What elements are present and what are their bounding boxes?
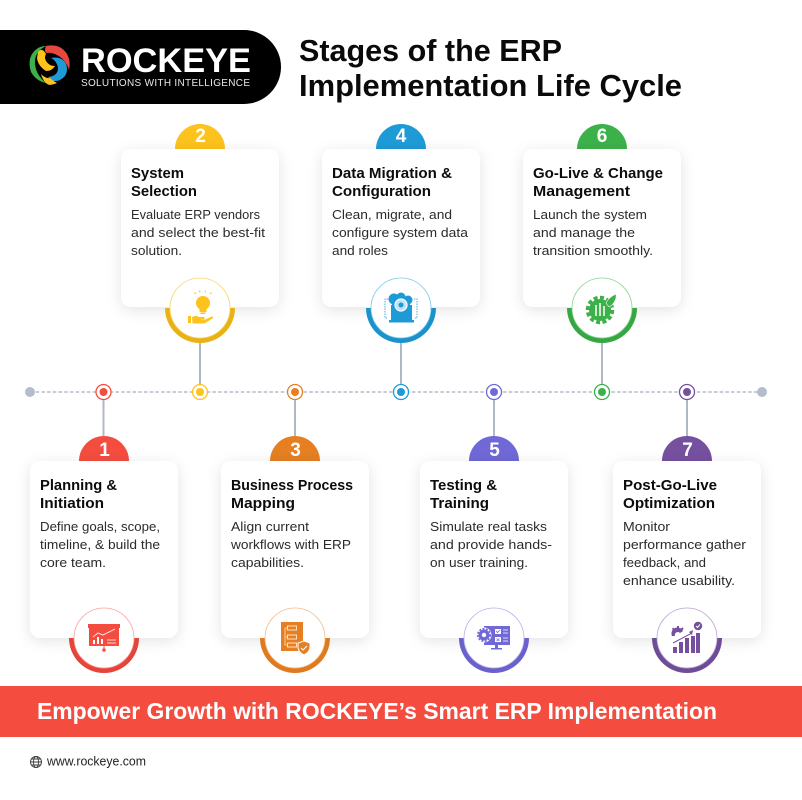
panel: stage 4 Data Migration & Configuration: configure system data — [332, 226, 468, 240]
title: Stages of the ERP — [299, 33, 562, 68]
icon: presentation board — [88, 624, 120, 652]
logo tagline: SOLUTIONS WITH INTELLIGENCE — [81, 78, 250, 89]
banner: Empower Growth with ROCKEYE’s Smart ERP Implementation — [37, 698, 717, 724]
panel: stage 3 Business Process Mapping: workflows with ERP — [230, 538, 351, 552]
website footer — [30, 754, 146, 768]
panel: stage 5 Testing & Training: and provide hands- — [430, 538, 552, 552]
panel: stage 3 Business Process Mapping: capabilities. — [231, 556, 304, 570]
panel: stage 1 Planning & Initiation: Define goals, scope, — [40, 520, 160, 534]
icon: globe — [30, 756, 42, 768]
panel: stage 5 Testing & Training: Testing & — [430, 477, 497, 494]
title — [299, 33, 682, 103]
panel: stage 5 Testing & Training: 5 — [489, 440, 500, 461]
panel: stage 7 Post-Go-Live Optimization: enhance usability. — [623, 574, 735, 588]
panel: stage 3 Business Process Mapping: Mapping — [231, 495, 295, 512]
icon: light bulb in hand — [188, 290, 213, 324]
panel: stage 7 Post-Go-Live Optimization: Monitor — [623, 520, 670, 534]
panel: stage 6 Go-Live & Change Management — [523, 124, 681, 343]
panel: stage 6 Go-Live & Change Management: transition smoothly. — [533, 244, 653, 258]
panel: stage 3 Business Process Mapping — [221, 436, 369, 673]
panel: stage 7 Post-Go-Live Optimization: Post-Go-Live — [623, 477, 717, 494]
panel: stage 2 System Selection: solution. — [131, 244, 182, 258]
panel: stage 5 Testing & Training: Training — [430, 495, 489, 512]
panel: stage 2 System Selection: Selection — [131, 183, 197, 200]
title: Implementation Life Cycle — [299, 68, 682, 103]
banner — [0, 686, 802, 737]
panel: stage 1 Planning & Initiation — [30, 436, 178, 673]
icon: process document with shield — [281, 622, 310, 655]
icon: cloud and laptop — [385, 292, 417, 322]
panel: stage 6 Go-Live & Change Management: and manage the — [533, 226, 635, 240]
panel: stage 3 Business Process Mapping: Align current — [231, 520, 310, 534]
icon: monitor and gear — [476, 626, 510, 650]
panel: stage 5 Testing & Training: Simulate real tasks — [430, 520, 547, 534]
panel: stage 1 Planning & Initiation: timeline, & build the — [40, 538, 160, 552]
panel: stage 1 Planning & Initiation: 1 — [99, 440, 110, 461]
panel: stage 7 Post-Go-Live Optimization: 7 — [682, 440, 693, 461]
panel: stage 7 Post-Go-Live Optimization: performance gather — [623, 538, 746, 552]
panel: stage 5 Testing & Training: on user training. — [430, 556, 528, 570]
panel: stage 1 Planning & Initiation: Initiation — [40, 495, 104, 512]
panel: stage 4 Data Migration & Configuration: Clean, migrate, and — [332, 208, 452, 222]
panel: stage 2 System Selection: and select the best-fit — [131, 226, 266, 240]
logo wordmark: ROCKEYE — [81, 42, 251, 80]
icon: gear and rocket — [588, 294, 616, 322]
icon: growth chart with gear — [671, 622, 702, 653]
panel: stage 7 Post-Go-Live Optimization: Optimization — [623, 495, 715, 512]
panel: stage 2 System Selection: 2 — [195, 126, 206, 147]
panel: stage 4 Data Migration & Configuration: Data Migration & — [332, 165, 452, 182]
website address: www.rockeye.com — [46, 754, 146, 768]
panel: stage 4 Data Migration & Configuration: Configuration — [332, 183, 431, 200]
panel: stage 6 Go-Live & Change Management: Management — [533, 183, 630, 200]
timeline — [25, 340, 767, 438]
panel: stage 6 Go-Live & Change Management: Launch the system — [533, 208, 647, 222]
panel: stage 7 Post-Go-Live Optimization: feedback, and — [623, 556, 706, 570]
panel: stage 7 Post-Go-Live Optimization — [613, 436, 761, 673]
panel: stage 6 Go-Live & Change Management: 6 — [597, 126, 607, 147]
panel: stage 6 Go-Live & Change Management: Go-Live & Change — [533, 165, 663, 182]
panel: stage 1 Planning & Initiation: Planning & — [40, 477, 117, 494]
panel: stage 4 Data Migration & Configuration: 4 — [396, 126, 407, 147]
panel: stage 3 Business Process Mapping: 3 — [290, 440, 301, 461]
panel: stage 4 Data Migration & Configuration: and roles — [332, 244, 388, 258]
panel: stage 4 Data Migration & Configuration — [322, 124, 480, 343]
icon: logo swirl — [30, 45, 70, 85]
panel: stage 5 Testing & Training — [420, 436, 568, 673]
panel: stage 2 System Selection — [121, 124, 279, 343]
logo badge — [0, 30, 281, 104]
panel: stage 3 Business Process Mapping: Business Process — [231, 477, 353, 494]
panel: stage 2 System Selection: Evaluate ERP vendors — [131, 208, 260, 222]
panel: stage 1 Planning & Initiation: core team. — [40, 556, 106, 570]
panel: stage 2 System Selection: System — [131, 165, 184, 182]
